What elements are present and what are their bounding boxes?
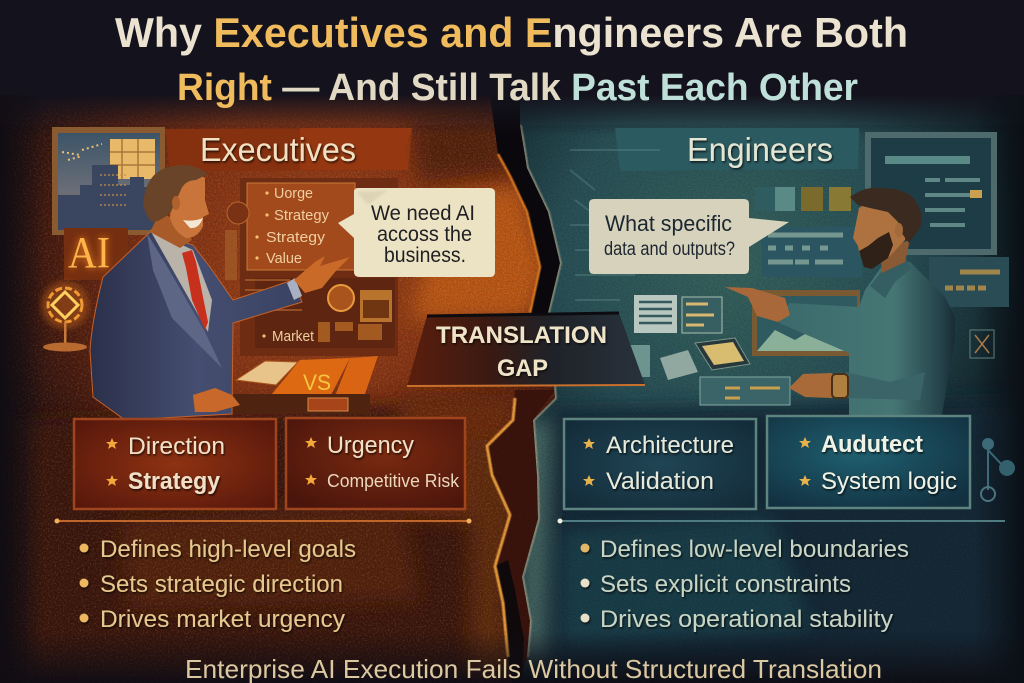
icon: AI sign: AI: [68, 228, 110, 277]
board list text: Market: [272, 328, 315, 345]
star bullet: [583, 475, 595, 486]
pointing hand: [294, 256, 350, 293]
translation gap label: GAP: [497, 355, 548, 382]
panel: audutect and system logic box: Audutect: [821, 431, 923, 458]
speech bubble: engineers: What specific: [605, 211, 732, 236]
speech bubble: engineers: data and outputs?: [604, 239, 735, 260]
speech bubble: engineers: [589, 199, 789, 274]
divider: executives: [54, 518, 472, 524]
speech bubble: executives: We need AI: [371, 202, 475, 225]
star bullet: [583, 438, 595, 449]
panel: urgency and competitive risk box: [286, 418, 465, 509]
translation gap label: TRANSLATION: [436, 322, 607, 349]
heading banner: Executives: [165, 128, 412, 171]
heading banner: Engineers: Engineers: [687, 131, 833, 168]
pointing hand: [725, 287, 790, 322]
bullet list: engineers: Sets explicit constraints: [600, 571, 851, 598]
central crack: [487, 95, 560, 683]
neck and head: [880, 240, 910, 273]
star bullet: [799, 475, 811, 486]
icon: AI sign: [64, 228, 128, 280]
shirt and lapels: [150, 230, 212, 332]
panel: audutect and system logic box: System logic: [821, 468, 957, 495]
heading banner: Executives: Executives: [200, 131, 356, 168]
board list text: Strategy: [274, 207, 329, 224]
chart board behind executive: [225, 178, 398, 356]
neck and head: [150, 212, 192, 248]
panel: direction and strategy box: Strategy: [128, 468, 221, 495]
title line 1: Why Executives and Engineers Are Both: [115, 9, 908, 56]
panel: architecture and validation box: Architecture: [606, 432, 734, 459]
collar: [870, 258, 912, 298]
star bullet: [799, 437, 811, 448]
bullet list: engineers: [580, 536, 909, 633]
shirt body: [779, 262, 955, 415]
icon: glowing lamp: [41, 281, 89, 352]
engineer figure: [725, 188, 955, 415]
board list text: Value: [266, 250, 302, 267]
executive figure: [90, 165, 350, 420]
panel: architecture and validation box: [564, 419, 756, 509]
presentation cards on desk: [232, 356, 378, 414]
bullet list: executives: Drives market urgency: [100, 606, 345, 633]
monitor: top right dashboard: [865, 132, 997, 255]
translation gap label: [407, 313, 645, 386]
star bullet: [106, 438, 118, 449]
screens and diagrams behind engineer: [570, 150, 1009, 405]
panel: direction and strategy box: Direction: [128, 433, 225, 460]
divider: engineers: [558, 518, 1005, 524]
presentation cards on desk: VS: [303, 370, 331, 395]
panel: executives side background: [0, 95, 560, 683]
board list text: [255, 185, 329, 345]
title line 2: Right — And Still Talk Past Each Other: [177, 67, 858, 109]
star bullet: [305, 474, 317, 485]
lower hand: [193, 388, 240, 412]
icon: circuit nodes: [981, 438, 1015, 501]
bullet list: engineers: Defines low-level boundaries: [600, 536, 909, 563]
picture window with city skyline: [52, 127, 165, 235]
heading banner: Engineers: [615, 128, 859, 171]
bullet list: executives: Sets strategic direction: [100, 571, 343, 598]
panel: engineers side background: [500, 95, 1024, 683]
bullet list: engineers: Drives operational stability: [600, 606, 893, 633]
shirt cuff: [287, 278, 302, 300]
lower arm and hand with watch: [845, 372, 925, 400]
star bullet: [106, 475, 118, 486]
board list text: Uorge: [274, 185, 313, 202]
bullet list: executives: [80, 536, 356, 633]
suit body: [90, 232, 302, 420]
speech bubble: executives: [338, 188, 495, 277]
board list text: Strategy: [266, 229, 326, 246]
panel: urgency and competitive risk box: Urgency: [327, 432, 414, 459]
panel: architecture and validation box: Validation: [606, 468, 714, 495]
speech bubble: executives: accoss the: [377, 223, 472, 246]
bullet list: executives: Defines high-level goals: [100, 536, 356, 563]
panel: audutect and system logic box: [767, 416, 970, 508]
red tie: [182, 250, 208, 330]
speech bubble: executives: business.: [384, 244, 466, 267]
star bullet: [305, 437, 317, 448]
panel: urgency and competitive risk box: Competitive Risk: [327, 471, 460, 491]
panel: direction and strategy box: [74, 419, 276, 509]
